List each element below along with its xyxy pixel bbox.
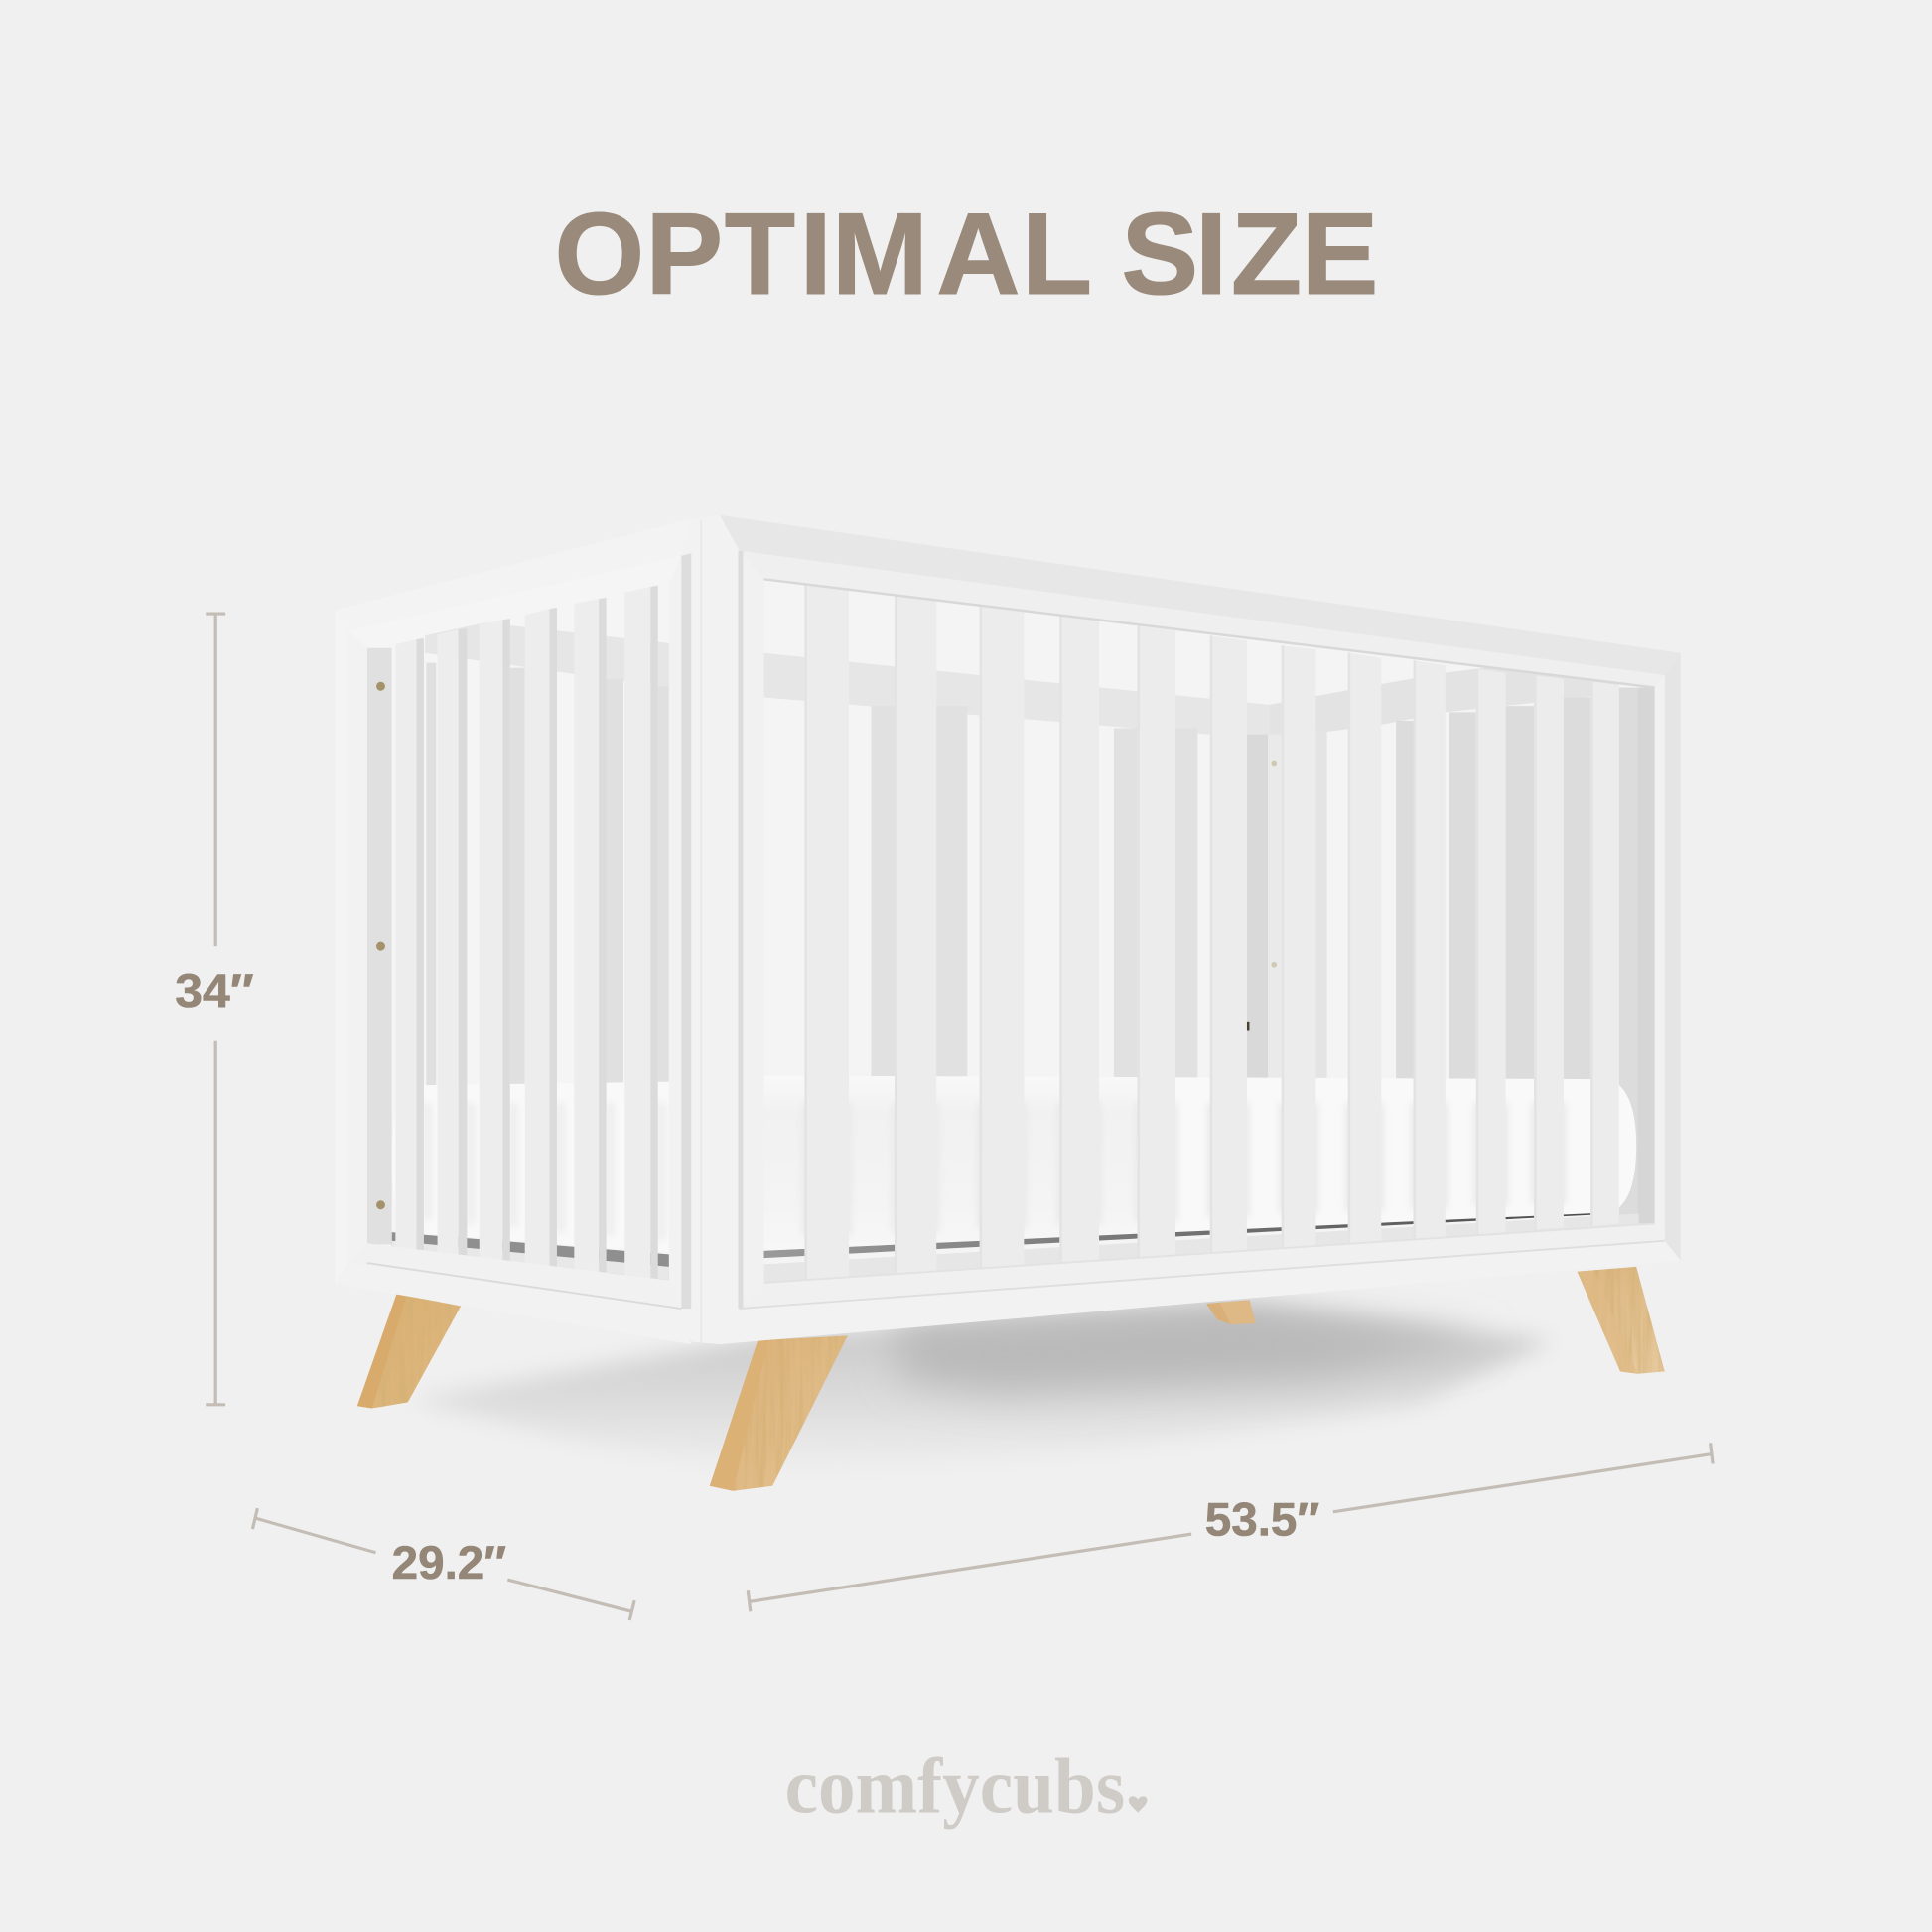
end side frame bbox=[336, 518, 691, 1344]
dimension: height line bbox=[206, 614, 225, 1405]
mattress: end side bbox=[392, 1082, 669, 1280]
far rail seen through the end side bbox=[425, 617, 669, 688]
long side slat edges bbox=[806, 584, 1591, 1283]
long side opening bbox=[763, 579, 1655, 1284]
screws on far post bbox=[1246, 761, 1277, 1031]
crib frame silhouette bbox=[336, 515, 1681, 1344]
slat shadows on mattress: long side bbox=[802, 1103, 1566, 1236]
end side post bbox=[367, 648, 392, 1244]
crib leg: right bbox=[1578, 1267, 1665, 1374]
icon: heart bbox=[1129, 1796, 1147, 1813]
crib leg: back bbox=[1206, 1300, 1256, 1324]
title: OPTIMAL SIZE bbox=[554, 189, 1378, 319]
dimension: length value: 53.5″ bbox=[1205, 1492, 1319, 1545]
end side slats bbox=[395, 586, 658, 1284]
dimension: depth value: 29.2″ bbox=[392, 1536, 506, 1588]
dimension: depth line bbox=[252, 1508, 634, 1620]
corner post bbox=[691, 515, 738, 1344]
dimension: height value: 34″ bbox=[175, 964, 254, 1017]
far rail seen through the long side bbox=[763, 650, 1619, 740]
far slats seen through the end side bbox=[426, 663, 669, 1088]
floor shadow bbox=[412, 1307, 1553, 1476]
slat shadows on mattress: end side bbox=[424, 1103, 665, 1240]
dimension: length line bbox=[748, 1443, 1713, 1611]
brand logo: comfycubs bbox=[785, 1743, 1125, 1831]
long side slats bbox=[804, 584, 1619, 1283]
crib bbox=[336, 515, 1681, 1344]
far slats seen through the long side bbox=[871, 688, 1655, 1223]
long side frame bbox=[720, 515, 1681, 1344]
end side opening bbox=[367, 583, 669, 1280]
crib leg: left bbox=[357, 1294, 461, 1409]
screws on end post bbox=[376, 682, 385, 1209]
mattress: long side bbox=[763, 1075, 1639, 1284]
crib leg: front bbox=[710, 1335, 848, 1491]
